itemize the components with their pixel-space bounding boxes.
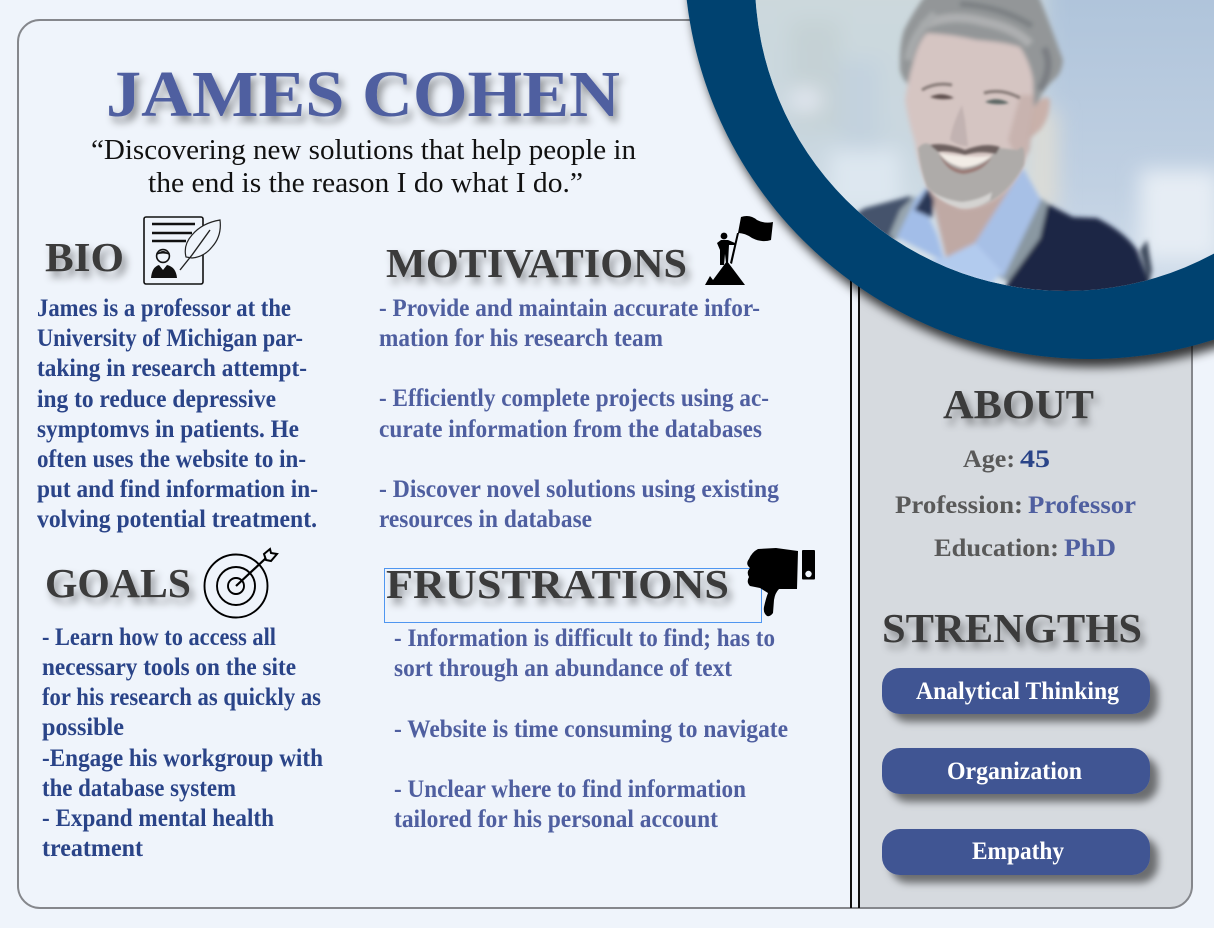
icon: document and quill xyxy=(144,217,220,284)
text block: motivations: - Discover novel solutions using existing xyxy=(379,476,779,503)
text block: about details: Professor xyxy=(1028,492,1136,519)
text block: frustrations xyxy=(394,625,788,833)
eyes xyxy=(930,94,954,99)
quote xyxy=(91,135,636,199)
text block: about details: PhD xyxy=(1064,535,1116,562)
text block: frustrations: - Information is difficult to find; has to xyxy=(394,625,775,652)
portrait ring xyxy=(684,0,1214,359)
heading: strengths: STRENGTHS xyxy=(882,605,1142,651)
text block: goals: possible xyxy=(42,714,124,741)
sweater left xyxy=(856,193,914,240)
text block: goals: treatment xyxy=(42,835,144,862)
button: empathy xyxy=(882,829,1150,875)
title: JAMES COHEN xyxy=(106,58,620,131)
heading: motivations: MOTIVATIONS xyxy=(386,240,687,286)
text block: bio: put and find information in- xyxy=(37,476,318,503)
text block: motivations: - Efficiently complete projects using ac- xyxy=(379,385,769,412)
text block: motivations: curate information from the databases xyxy=(379,416,762,443)
text block: frustrations: tailored for his personal account xyxy=(394,806,719,833)
icon: person with flag on summit xyxy=(705,216,773,285)
button: organization: Organization xyxy=(947,758,1082,785)
sweater right xyxy=(1000,202,1149,300)
text block: about details: Profession: xyxy=(895,492,1023,519)
shirt left collar xyxy=(897,187,945,262)
heading: about: ABOUT xyxy=(943,381,1094,427)
heading: goals: GOALS xyxy=(45,560,191,606)
text block: bio: volving potential treatment. xyxy=(37,506,317,533)
text block: frustrations: sort through an abundance of text xyxy=(394,655,733,682)
text block: motivations xyxy=(379,295,779,533)
text block: bio: often uses the website to in- xyxy=(37,446,306,473)
text block: motivations: resources in database xyxy=(379,506,592,533)
text block: goals: - Expand mental health xyxy=(42,805,274,832)
text block: about details xyxy=(895,446,1136,562)
ear xyxy=(1028,97,1050,140)
quote: “Discovering new solutions that help people in xyxy=(91,135,636,166)
smile xyxy=(939,153,992,167)
hair highlights xyxy=(922,18,1030,44)
icon: target with arrow xyxy=(204,549,277,618)
face xyxy=(905,33,1034,208)
text block: bio: symptomvs in patients. He xyxy=(37,416,299,443)
text block: goals: for his research as quickly as xyxy=(42,684,321,711)
neck xyxy=(928,184,1014,258)
text block: frustrations: - Website is time consuming to navigate xyxy=(394,716,788,743)
beard xyxy=(918,143,1024,208)
text block: motivations: - Provide and maintain accurate infor- xyxy=(379,295,760,322)
selection outline around frustrations heading xyxy=(384,568,762,622)
button: empathy: Empathy xyxy=(972,838,1064,865)
button: analytical thinking xyxy=(882,668,1150,714)
text block: bio: University of Michigan par- xyxy=(37,325,303,352)
icon: thumbs down with exclamation xyxy=(747,548,815,616)
text block: bio: taking in research attempt- xyxy=(37,355,307,382)
text block: goals: the database system xyxy=(42,775,236,802)
text block: bio: ing to reduce depressive xyxy=(37,386,276,413)
text block: goals: necessary tools on the site xyxy=(42,654,296,681)
portrait photo of James xyxy=(756,0,1214,291)
button: organization xyxy=(882,748,1150,794)
button: analytical thinking: Analytical Thinking xyxy=(916,678,1119,705)
hair back xyxy=(900,0,1063,113)
text block: motivations: mation for his research team xyxy=(379,325,663,352)
text block: bio xyxy=(37,295,318,533)
text block: about details: Education: xyxy=(934,535,1059,562)
panel: about sidebar background xyxy=(860,288,1191,907)
quote: the end is the reason I do what I do.” xyxy=(148,168,583,199)
eyebrows xyxy=(922,84,952,90)
shirt bottom xyxy=(925,243,1002,285)
text block: bio: James is a professor at the xyxy=(37,295,291,322)
text block: goals: -Engage his workgroup with xyxy=(42,745,323,772)
heading: bio: BIO xyxy=(45,234,124,280)
cheek shade xyxy=(1008,94,1034,156)
text block: about details: Age: xyxy=(963,446,1015,473)
heading: frustrations: FRUSTRATIONS xyxy=(386,561,729,607)
text block: goals xyxy=(42,624,323,862)
moustache xyxy=(930,144,1000,155)
text block: about details: 45 xyxy=(1020,446,1050,473)
nose shadow xyxy=(950,105,968,146)
text block: goals: - Learn how to access all xyxy=(42,624,276,651)
text block: frustrations: - Unclear where to find information xyxy=(394,776,746,803)
shirt right collar xyxy=(975,168,1041,278)
